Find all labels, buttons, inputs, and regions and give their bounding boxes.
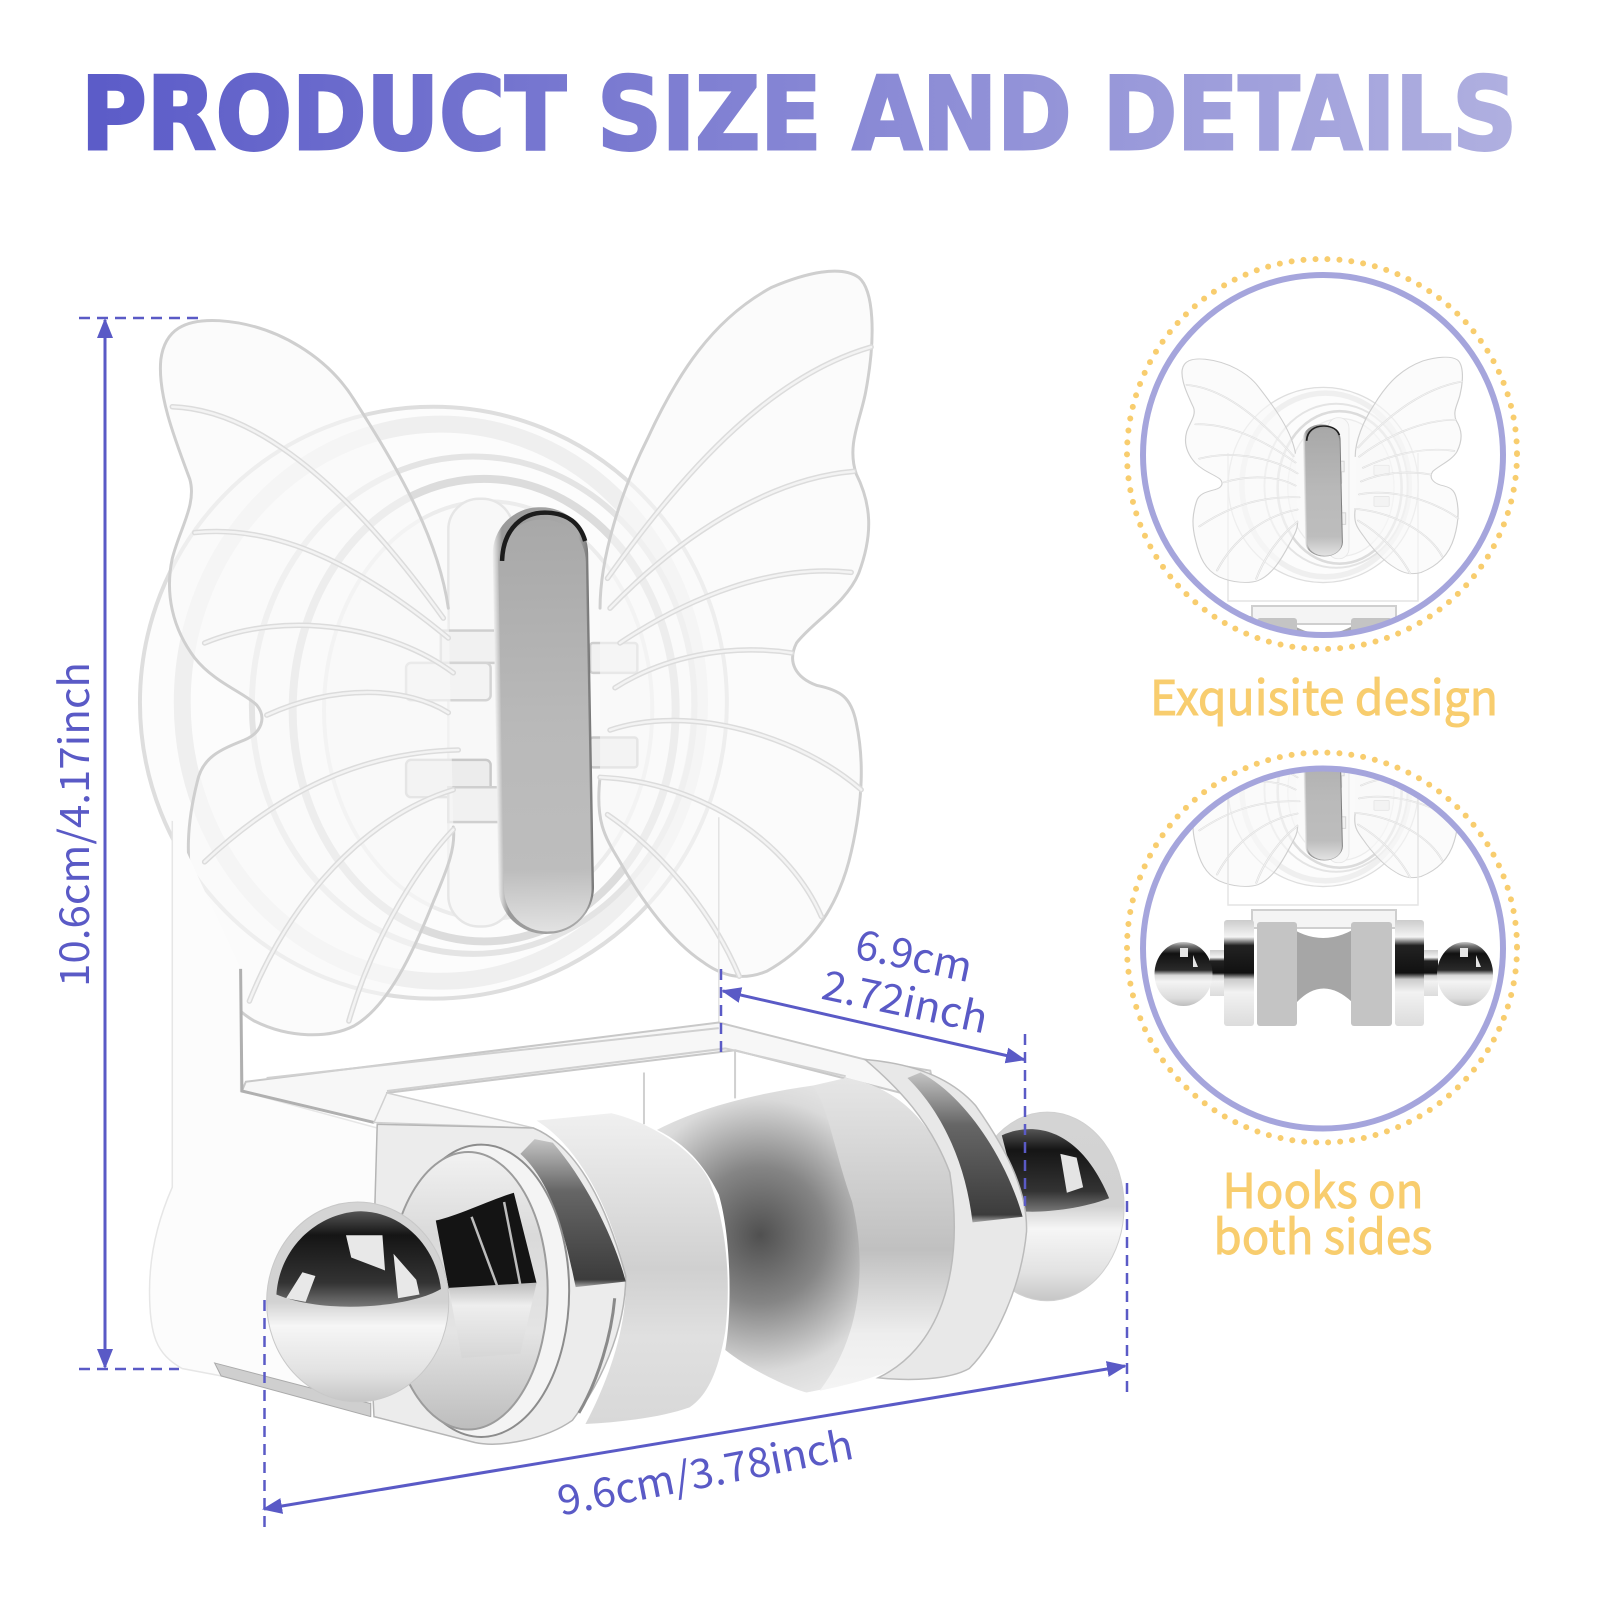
label second line: both sides <box>1214 1198 1432 1268</box>
depth arrow <box>723 991 1024 1060</box>
suction cup and back plate top <box>140 407 727 999</box>
depth dimension <box>721 911 1025 1206</box>
purple ring <box>1143 768 1503 1128</box>
right chrome cylinder <box>865 1060 1027 1379</box>
inset pill <box>1303 424 1343 557</box>
end disc <box>389 1152 548 1430</box>
foot strip <box>215 1363 371 1417</box>
purple ring <box>1143 275 1503 635</box>
yellow dotted ring <box>1127 752 1517 1142</box>
right ball <box>971 1112 1124 1301</box>
inset content: butterfly front view <box>1181 356 1463 632</box>
yellow dotted ring <box>1127 259 1517 649</box>
inset wings <box>1182 343 1462 594</box>
stem highlights <box>472 1202 520 1287</box>
left chrome lower stripe <box>579 1298 615 1413</box>
clear shelf <box>242 1023 937 1122</box>
right chrome dark stripe <box>907 1072 1023 1222</box>
stem <box>436 1193 537 1289</box>
height label: 10.6cm/4.17inch <box>41 662 101 987</box>
inset hook <box>1154 799 1493 1026</box>
height arrow <box>104 320 106 1367</box>
butterfly suction holder <box>140 271 872 1035</box>
left chrome cylinder <box>371 1124 626 1444</box>
depth label inch: 2.72inch <box>817 952 994 1045</box>
width dashes <box>264 1183 1127 1527</box>
width arrow <box>264 1366 1125 1509</box>
width label: 9.6cm/3.78inch <box>552 1411 858 1527</box>
right ball highlight <box>1060 1154 1083 1193</box>
inset bracket <box>1227 453 1419 632</box>
label: Exquisite design <box>1150 659 1498 729</box>
panel: hooks on both sides detail <box>1124 750 1520 1255</box>
height dimension <box>41 318 199 1369</box>
panel: main product illustration <box>140 271 1124 1444</box>
spool right band <box>813 1078 960 1391</box>
butterfly wings <box>160 271 872 1035</box>
stem lower <box>449 1283 537 1358</box>
height dashes <box>79 318 199 1369</box>
clear front strap <box>374 1093 533 1128</box>
inset wings <box>1192 774 1457 887</box>
centre spool <box>657 1078 960 1393</box>
label: Hooks on <box>1222 1152 1424 1222</box>
inset content: hook front view <box>1154 772 1493 1026</box>
hook assembly <box>150 817 1124 1444</box>
clear ring <box>393 1145 569 1437</box>
depth dashes <box>721 969 1025 1206</box>
panel: exquisite design detail <box>1127 259 1517 729</box>
left ball <box>267 1202 449 1402</box>
inset cup <box>1228 387 1418 583</box>
shelf left bend edge <box>241 969 374 1122</box>
left ball dark cap <box>276 1211 441 1307</box>
plate right edge <box>718 817 720 1023</box>
ball highlights <box>286 1235 420 1302</box>
left chrome dark stripe <box>520 1139 626 1287</box>
left white band <box>537 1113 728 1424</box>
inset cup <box>1229 772 1417 888</box>
depth label cm: 6.9cm <box>851 911 979 994</box>
chrome centre pill <box>492 506 595 935</box>
inset pill <box>1304 772 1343 860</box>
shelf inner edges <box>267 1028 846 1124</box>
back plate outline <box>150 821 377 1415</box>
width dimension <box>264 1183 1127 1527</box>
right ball dark cap <box>1002 1129 1109 1212</box>
